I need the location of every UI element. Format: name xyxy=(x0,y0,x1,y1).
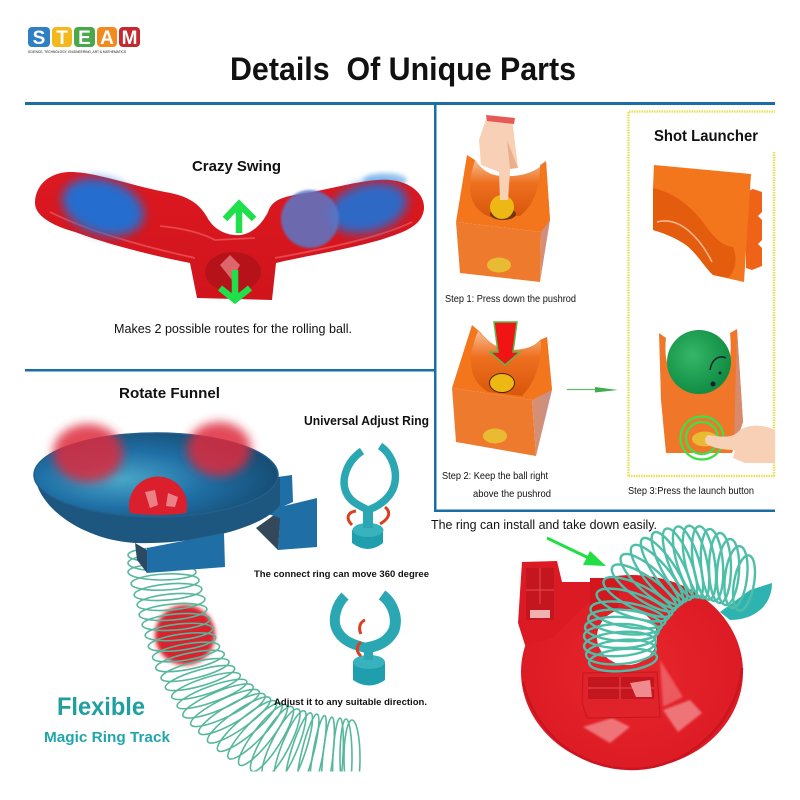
translucent blue ball xyxy=(281,190,339,248)
heading: crazy swing: Crazy Swing xyxy=(192,158,281,175)
right bracket dark inside xyxy=(256,510,281,550)
block: step 3 xyxy=(659,329,743,453)
block: step 1 xyxy=(456,155,550,282)
right bracket back xyxy=(270,475,293,510)
dome highlights xyxy=(583,718,630,743)
caption: step 1: Step 1: Press down the pushrod xyxy=(445,294,576,305)
title: Details Of Unique Parts xyxy=(230,51,576,87)
funnel bowl xyxy=(34,422,317,573)
icon: adjust ring upright xyxy=(344,446,395,549)
logo: STEAM xyxy=(28,27,140,54)
caption: step 2: Step 2: Keep the ball right xyxy=(442,471,548,482)
caption: crazy swing: Makes 2 possible routes for the rolling ball. xyxy=(114,321,352,336)
heading: rotate funnel: Rotate Funnel xyxy=(119,385,220,402)
arrow: down xyxy=(220,270,250,300)
caption: ring install: The ring can install and take down easily. xyxy=(431,517,657,532)
bowl outer xyxy=(35,477,280,543)
arrow: green pointer xyxy=(547,538,606,566)
piece: quarter track xyxy=(653,165,762,282)
panel: ring install xyxy=(431,517,772,769)
block top left xyxy=(518,561,600,645)
green ball xyxy=(667,330,731,394)
blurred red ball left xyxy=(53,424,123,482)
bowl inner xyxy=(34,433,278,517)
caption: step 2: above the pushrod xyxy=(473,489,551,500)
caption: step 2 xyxy=(442,471,551,500)
spring coils xyxy=(128,548,360,796)
right bracket front xyxy=(262,498,317,550)
icon: finger on button xyxy=(705,426,775,463)
caption: adjust direction: Adjust it to any suitable direction. xyxy=(274,697,427,708)
bottom bracket front xyxy=(147,533,225,573)
label: magic ring track: Magic Ring Track xyxy=(44,729,171,746)
blue motion halo xyxy=(363,173,407,187)
logo: STEAM: E xyxy=(78,28,91,49)
red swing track xyxy=(35,172,424,300)
red rotate arrows xyxy=(348,507,389,525)
icon: adjust ring tilted xyxy=(335,595,395,686)
panel dividers xyxy=(25,102,775,512)
logo: STEAM: S xyxy=(33,28,45,49)
swing center socket xyxy=(205,252,261,292)
panel: rotate funnel xyxy=(34,385,429,796)
panel: shot launcher xyxy=(442,112,775,500)
swing highlights xyxy=(50,212,412,258)
red rotate arrows xyxy=(357,620,365,656)
panel: crazy swing xyxy=(35,158,424,336)
icon: green press rings xyxy=(680,416,724,460)
arrow: green to step 3 xyxy=(567,387,618,392)
block bottom xyxy=(582,672,660,718)
caption: connect ring: The connect ring can move 360 degree xyxy=(254,569,429,580)
logo: STEAM: A xyxy=(100,28,114,49)
arrow: red down xyxy=(490,322,520,365)
blurred blue ball right xyxy=(323,174,413,242)
heading: universal adjust ring: Universal Adjust Ring xyxy=(304,414,429,428)
magic ring spring xyxy=(128,548,360,796)
magic ring spring arch xyxy=(583,523,759,674)
arrow: up xyxy=(225,204,254,233)
hole xyxy=(597,609,657,665)
bottom bracket dark side xyxy=(135,543,147,573)
blurred blue ball left xyxy=(55,168,151,246)
icon: hand pressing xyxy=(479,115,518,200)
block: step 2 xyxy=(452,325,552,456)
dotted yellow frame xyxy=(628,112,775,476)
logo: STEAM: T xyxy=(56,28,68,49)
logo: STEAM: M xyxy=(122,28,137,49)
red dome base xyxy=(518,561,743,769)
block top center xyxy=(590,578,620,612)
red ball xyxy=(129,476,187,515)
logo: STEAM: SCIENCE, TECHNOLOGY, ENGINEERING, ART & MATHEMATICS xyxy=(28,50,126,54)
heading: shot launcher: Shot Launcher xyxy=(654,128,758,145)
caption: step 3: Step 3:Press the launch button xyxy=(628,486,754,497)
teal foot xyxy=(720,583,772,620)
socket highlight xyxy=(220,255,240,280)
label: flexible: Flexible xyxy=(57,693,145,721)
blurred red ball right xyxy=(187,422,251,476)
red ball in spring xyxy=(155,605,215,665)
